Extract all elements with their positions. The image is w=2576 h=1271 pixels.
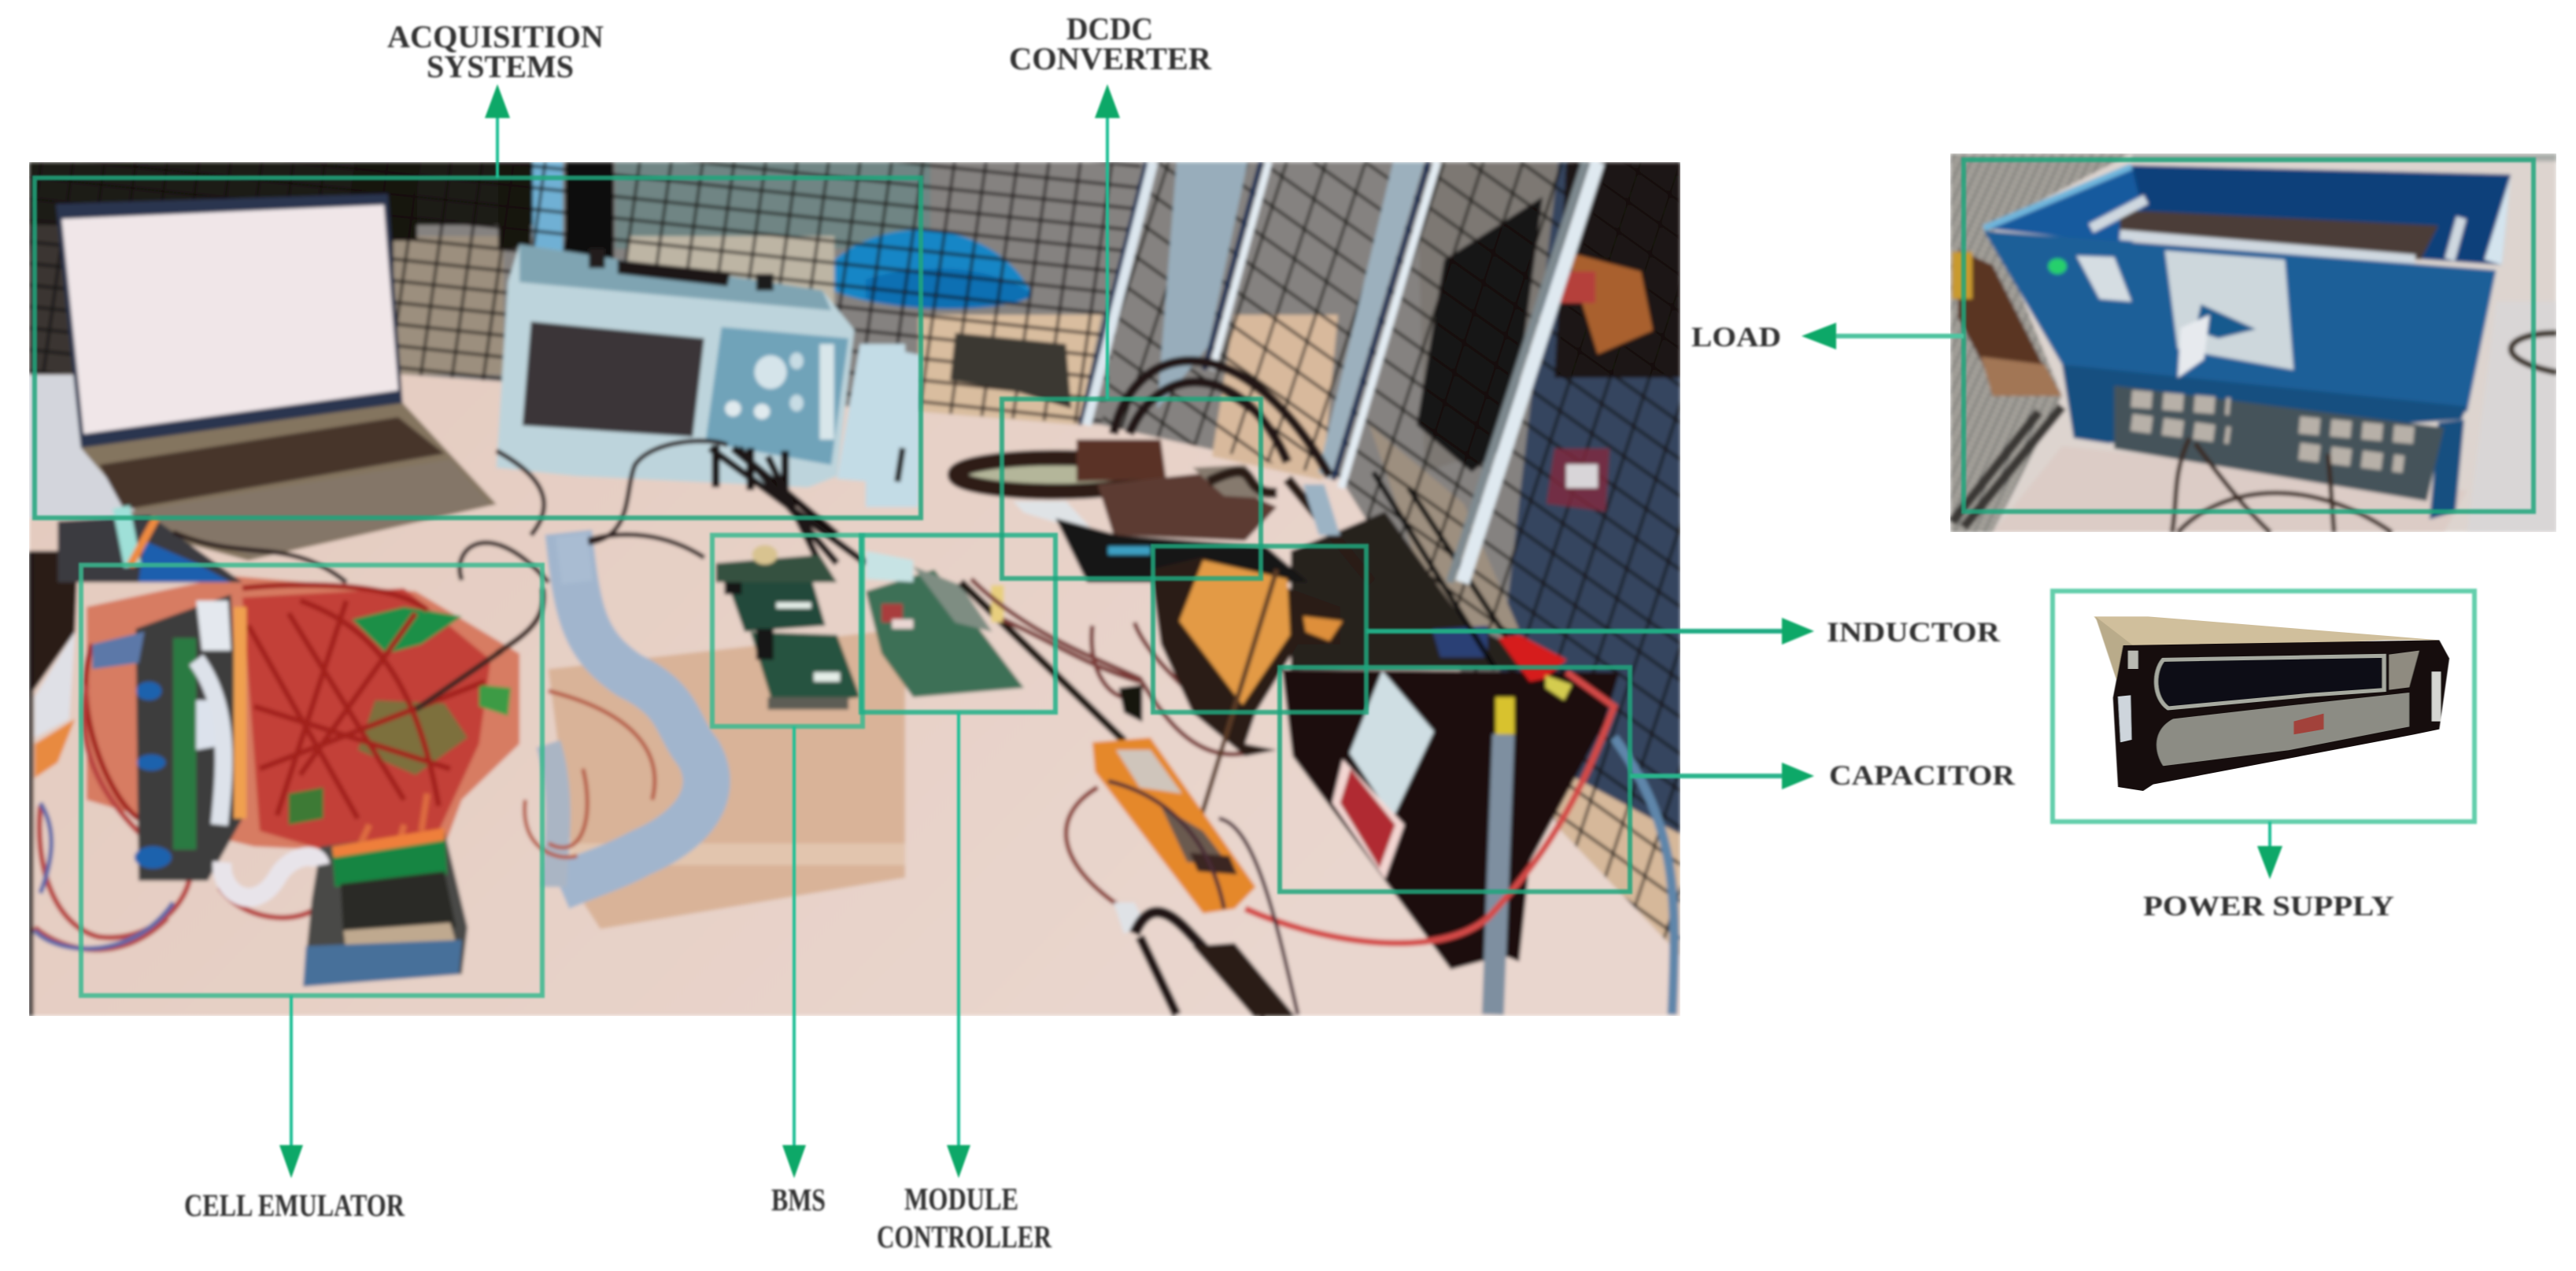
dark fence and wiring behind the capacitor (1291, 512, 1558, 669)
arrow: acquisition systems (485, 84, 510, 178)
arrow: DCDC converter (1095, 84, 1120, 399)
label: DCDC converter: DCDC (1066, 11, 1153, 46)
photo: cell emulator wiring and boards (35, 576, 543, 987)
label: acquisition systems (387, 19, 604, 84)
box: capacitor (1280, 667, 1630, 892)
box: BMS (712, 535, 863, 726)
photo: vertical cage poles (1080, 162, 1598, 582)
power supply photograph (2094, 616, 2449, 791)
label: inductor: INDUCTOR (1827, 616, 2001, 648)
load photo: cage mesh (1950, 153, 2557, 533)
box: DCDC converter (1002, 399, 1261, 578)
label: capacitor: CAPACITOR (1829, 759, 2016, 791)
load photo: blue resistor cabinet (1984, 165, 2511, 533)
label: module controller (877, 1181, 1052, 1254)
photo: laptop (29, 194, 497, 560)
callout arrows (279, 84, 2282, 1178)
label: DCDC converter (1009, 11, 1212, 76)
label: DCDC converter: CONVERTER (1009, 41, 1212, 76)
arrow: cell emulator (279, 996, 303, 1178)
photo: capacitor box (1245, 635, 1674, 1014)
photo: oscilloscope and instrument (497, 244, 905, 535)
arrow: inductor (1366, 618, 1814, 645)
label: acquisition systems: SYSTEMS (427, 49, 574, 84)
label: module controller: CONTROLLER (877, 1219, 1052, 1254)
photo: inductor (1151, 556, 1346, 815)
photo: cage wall background (29, 162, 1680, 955)
photo: DCDC converter (955, 361, 1372, 582)
arrow: capacitor (1630, 763, 1814, 789)
label: cell emulator: CELL EMULATOR (184, 1188, 405, 1223)
photo: left edge equipment (29, 551, 78, 1016)
box: load (1964, 160, 2533, 512)
component highlight boxes (35, 160, 2533, 996)
photo: ribbon cable and cork sheet (525, 532, 905, 929)
label: load: LOAD (1691, 321, 1781, 353)
photo: BMS boards (722, 567, 860, 710)
arrow: BMS (782, 726, 806, 1178)
box: module controller (861, 535, 1055, 712)
box: acquisition systems (35, 178, 921, 518)
label: module controller: MODULE (904, 1181, 1018, 1217)
label: power supply: POWER SUPPLY (2143, 890, 2394, 922)
arrow: power supply (2257, 822, 2282, 879)
photo: module controller board (866, 551, 1245, 754)
photo: multimeter and clamp (1066, 737, 1298, 1016)
box: power supply (2053, 591, 2474, 822)
arrow: load (1802, 323, 1964, 349)
load photograph (1950, 153, 2557, 533)
box: inductor (1153, 546, 1366, 712)
arrow: module controller (947, 712, 970, 1178)
box: cell emulator (81, 565, 542, 996)
main photograph of the test bench (29, 162, 1680, 1016)
label: acquisition systems: ACQUISITION (387, 19, 604, 54)
label: BMS: BMS (771, 1182, 826, 1217)
